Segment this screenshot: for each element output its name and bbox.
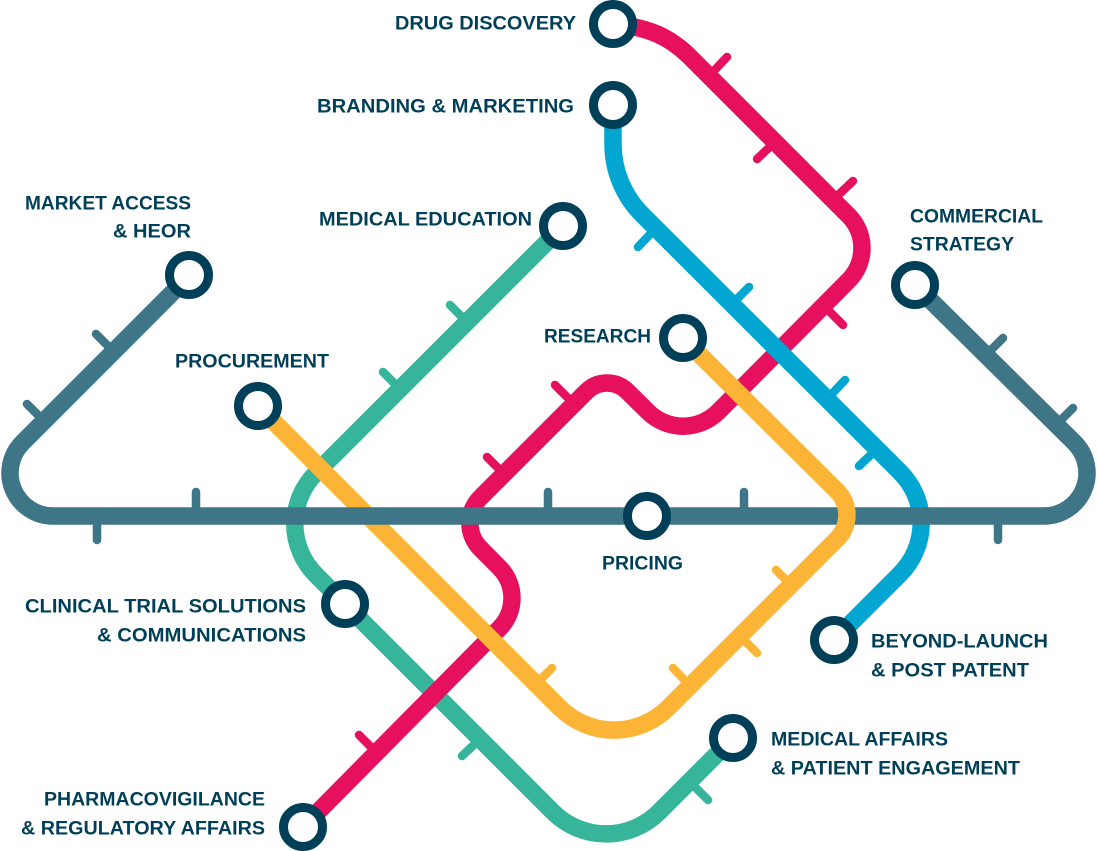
label: market access and HEOR: MARKET ACCESS (25, 192, 191, 214)
line: branding to beyond-launch (blue) (613, 105, 921, 640)
station: beyond-launch (814, 620, 854, 660)
label: medical affairs and patient engagement (771, 728, 1020, 779)
label: procurement: PROCUREMENT (175, 350, 329, 372)
label: market access and HEOR: & HEOR (113, 220, 191, 242)
station: medical affairs (714, 718, 752, 758)
line: market access to commercial strategy (slate) (10, 276, 1087, 540)
station: pharmacovigilance (284, 808, 322, 846)
station: research (664, 318, 702, 358)
label: commercial strategy: COMMERCIAL (910, 205, 1043, 227)
station: medical education (544, 206, 582, 246)
label: pharmacovigilance and regulatory affairs (21, 788, 265, 839)
station: branding and marketing (594, 86, 632, 124)
label: medical affairs and patient engagement: & PATIENT ENGAGEMENT (771, 757, 1020, 779)
station: clinical trial solutions (326, 584, 364, 624)
station: pricing (628, 496, 666, 536)
label: beyond-launch and post patent: & POST PATENT (871, 659, 1029, 681)
label: clinical trial solutions and communications: & COMMUNICATIONS (97, 624, 306, 646)
label: medical affairs and patient engagement: MEDICAL AFFAIRS (771, 728, 948, 750)
yellow bend crossing over slate line (837, 491, 847, 539)
label: beyond-launch and post patent (871, 630, 1048, 681)
line: drug discovery to pharmacovigilance (pink) (303, 24, 862, 827)
label: pricing: PRICING (602, 552, 683, 574)
label: pharmacovigilance and regulatory affairs: PHARMACOVIGILANCE (44, 788, 265, 810)
label: clinical trial solutions and communications: CLINICAL TRIAL SOLUTIONS (25, 595, 306, 617)
label: clinical trial solutions and communications (25, 595, 306, 646)
line: procurement to research (yellow) (258, 338, 847, 730)
label: market access and HEOR (25, 192, 191, 242)
station: commercial strategy (896, 266, 934, 304)
station: procurement (238, 386, 278, 426)
label: pharmacovigilance and regulatory affairs: & REGULATORY AFFAIRS (21, 817, 265, 839)
station: drug discovery (594, 4, 632, 44)
line: medical education to medical affairs (teal) (295, 226, 733, 834)
label: research: RESEARCH (544, 325, 651, 347)
label: commercial strategy: STRATEGY (910, 233, 1014, 255)
label: medical education: MEDICAL EDUCATION (319, 208, 532, 230)
label: drug discovery: DRUG DISCOVERY (395, 12, 576, 34)
label: commercial strategy (910, 205, 1043, 255)
station: market access and HEOR (170, 256, 208, 294)
label: beyond-launch and post patent: BEYOND-LAUNCH (871, 630, 1048, 652)
label: branding and marketing: BRANDING & MARKETING (317, 95, 574, 117)
